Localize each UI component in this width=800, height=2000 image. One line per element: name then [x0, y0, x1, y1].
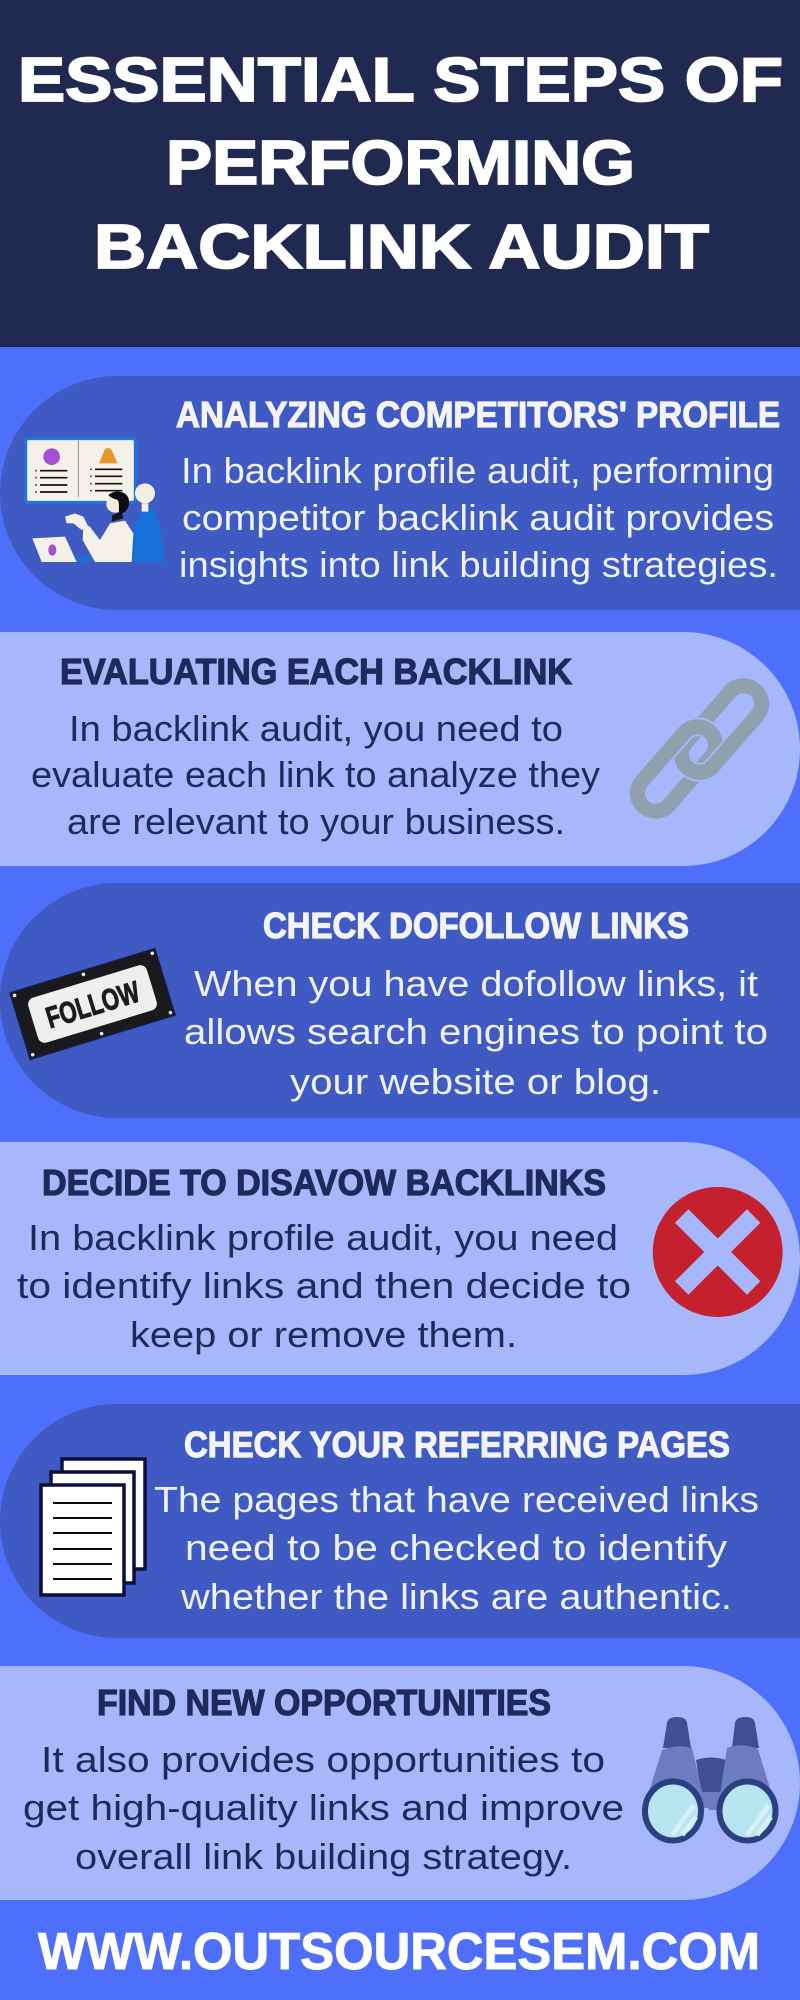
- text: check dofollow links: allows search engines to point to: [184, 1011, 768, 1052]
- text: decide to disavow backlinks: [17, 1217, 631, 1355]
- title: PERFORMING: [166, 129, 635, 198]
- text: evaluating each backlink: evaluate each link to analyze they: [31, 754, 600, 795]
- text: find new opportunities: overall link building strategy.: [75, 1836, 572, 1877]
- text: find new opportunities: It also provides opportunities to: [41, 1739, 605, 1780]
- panel: evaluating each backlink: [0, 632, 800, 866]
- icon: people reviewing a board: [26, 439, 164, 562]
- icon: chain link: [630, 678, 769, 819]
- panel: analyzing competitors' profile: [0, 376, 800, 610]
- text: check your referring pages: need to be checked to identify: [185, 1527, 727, 1568]
- text: evaluating each backlink: In backlink audit, you need to: [69, 708, 563, 749]
- title: ESSENTIAL STEPS OF: [18, 46, 783, 115]
- text: evaluating each backlink: are relevant to your business.: [67, 801, 565, 842]
- text: check dofollow links: When you have dofollow links, it: [194, 963, 758, 1004]
- heading: find new opportunities: FIND NEW OPPORTUNITIES: [97, 1682, 551, 1723]
- header banner: [0, 0, 800, 347]
- panel: check your referring pages: [0, 1404, 800, 1638]
- text: analyzing competitors: insights into link building strategies.: [179, 544, 778, 585]
- text: decide to disavow backlinks: keep or remove them.: [130, 1314, 517, 1355]
- text: find new opportunities: get high-quality links and improve: [23, 1787, 624, 1828]
- icon: follow sign: [10, 948, 175, 1060]
- text: decide to disavow backlinks: to identify links and then decide to: [17, 1265, 631, 1306]
- text: check your referring pages: The pages that have received links: [154, 1479, 759, 1520]
- text: check your referring pages: whether the links are authentic.: [180, 1576, 732, 1617]
- heading: decide to disavow backlinks: DECIDE TO DISAVOW BACKLINKS: [42, 1162, 606, 1203]
- text: check dofollow links: your website or blog.: [290, 1061, 661, 1102]
- title: BACKLINK AUDIT: [94, 213, 709, 282]
- icon: follow sign: FOLLOW: [42, 975, 144, 1035]
- panel: check dofollow links: [0, 883, 800, 1118]
- text: find new opportunities: [23, 1739, 624, 1877]
- text: evaluating each backlink: [31, 708, 600, 842]
- text: check dofollow links: [184, 963, 768, 1102]
- text: decide to disavow backlinks: In backlink profile audit, you need: [28, 1217, 618, 1258]
- heading: check dofollow links: CHECK DOFOLLOW LINKS: [263, 905, 689, 946]
- text: analyzing competitors: competitor backlink audit provides: [182, 497, 774, 538]
- icon: binoculars: [644, 1717, 776, 1840]
- heading: check your referring pages: CHECK YOUR REFERRING PAGES: [184, 1424, 730, 1465]
- heading: evaluating each backlink: EVALUATING EACH BACKLINK: [60, 651, 572, 692]
- text: analyzing competitors: [179, 450, 778, 585]
- title: [18, 46, 783, 282]
- icon: red cross: [653, 1187, 783, 1317]
- panel: decide to disavow backlinks: [0, 1142, 800, 1375]
- icon: stacked documents: [41, 1459, 145, 1595]
- panel: find new opportunities: [0, 1666, 800, 1900]
- text: check your referring pages: [154, 1479, 759, 1617]
- text: analyzing competitors: In backlink profile audit, performing: [181, 450, 774, 491]
- footer url: WWW.OUTSOURCESEM.COM: [38, 1923, 760, 1981]
